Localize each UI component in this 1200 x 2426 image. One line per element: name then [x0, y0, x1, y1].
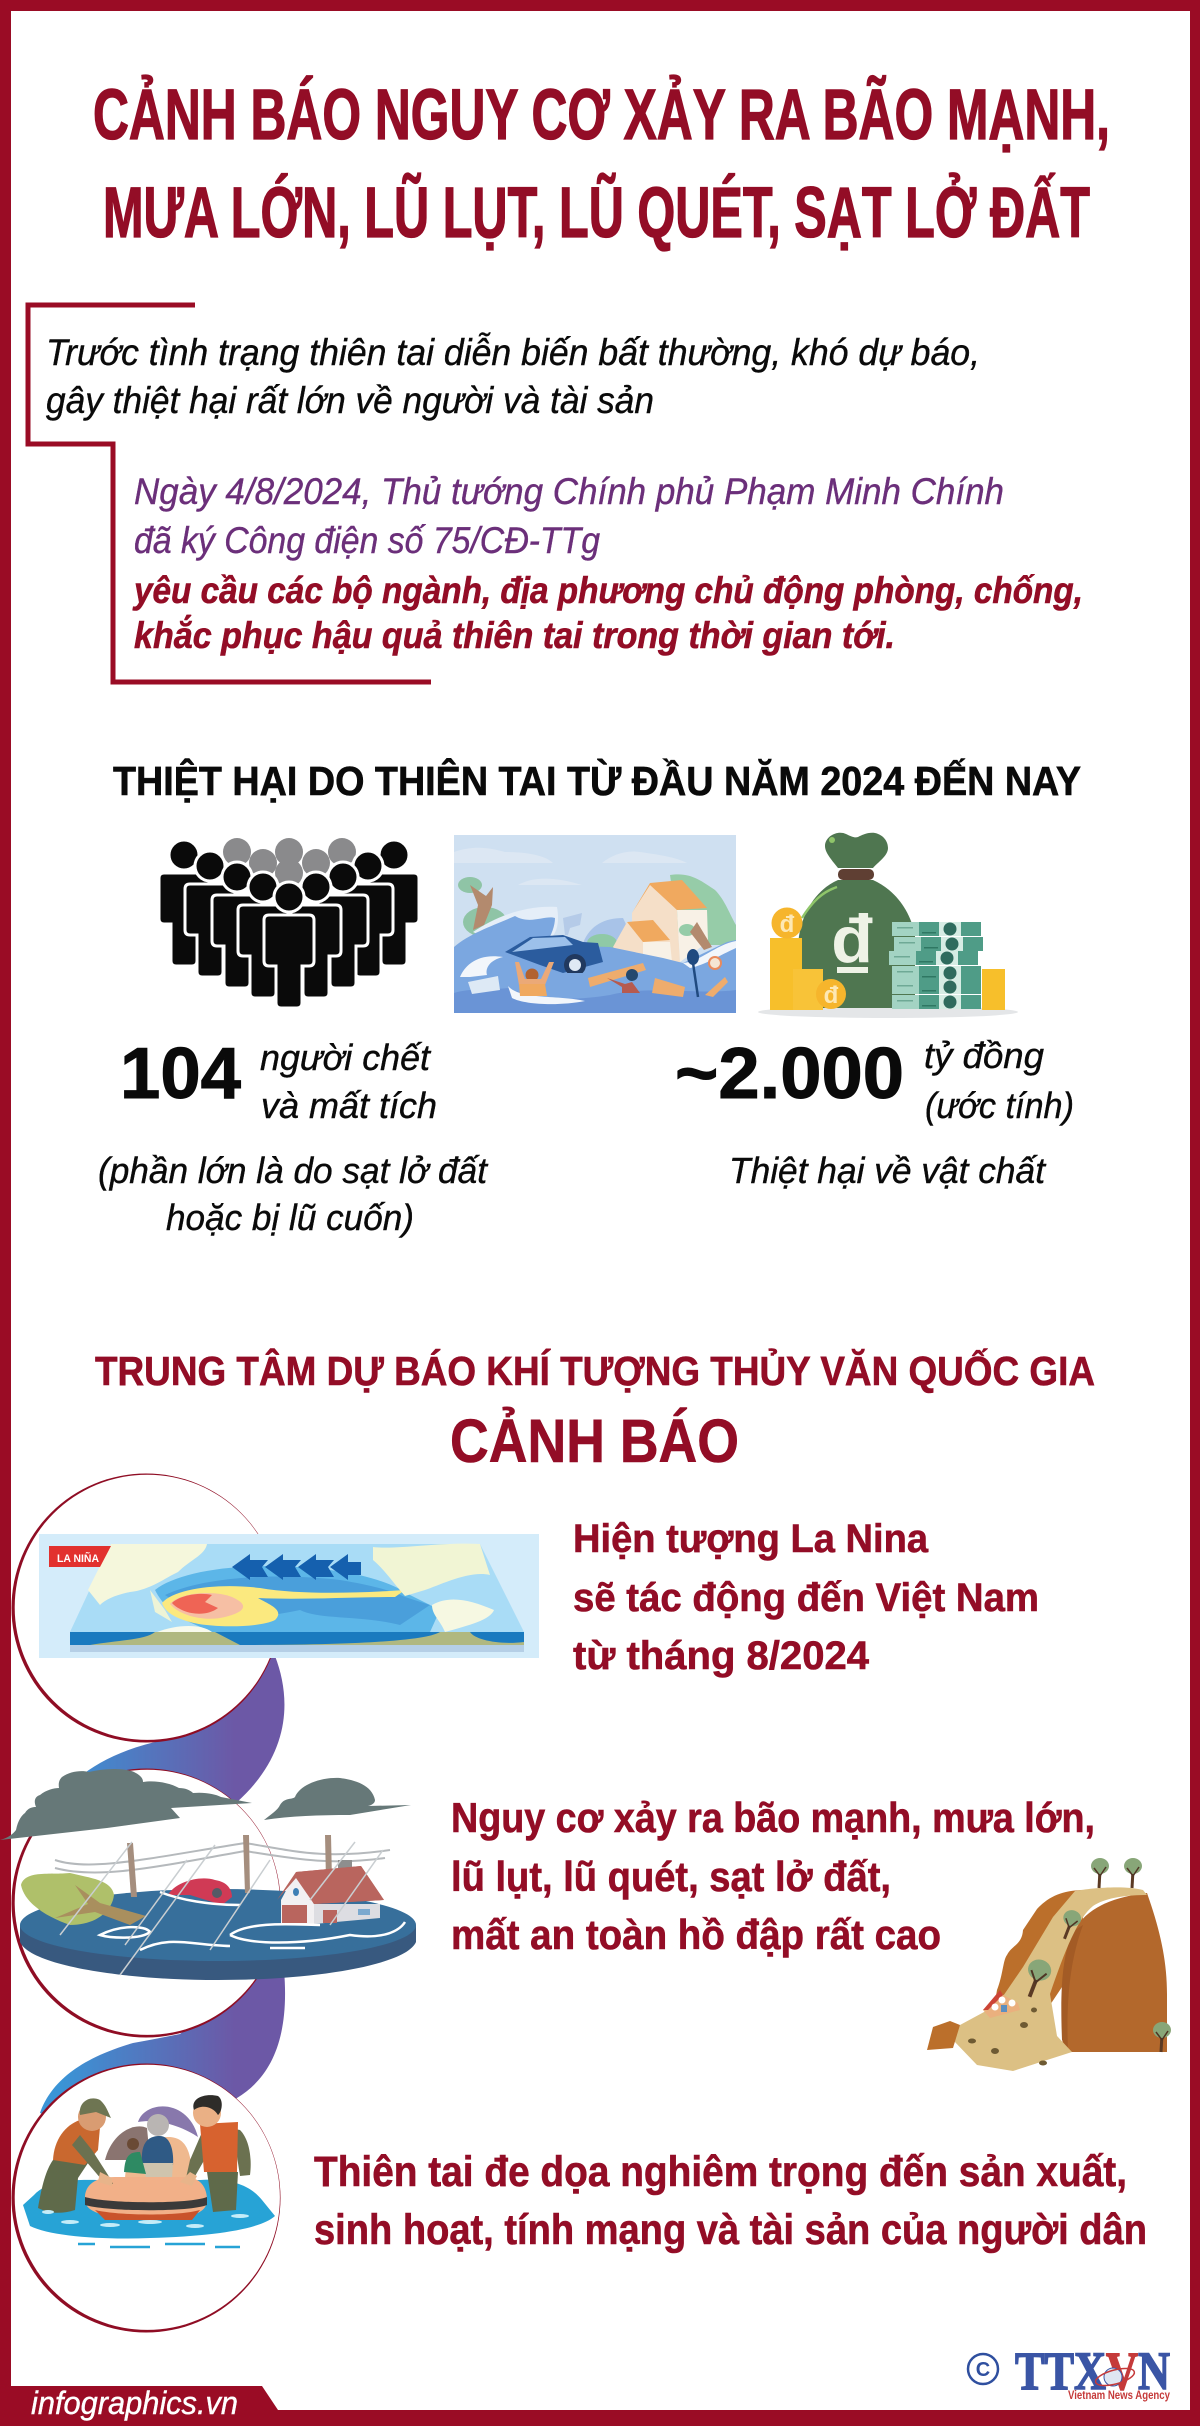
stat: people: người chết: [260, 1037, 432, 1078]
dispatch text: yêu cầu các bộ ngành, địa phương chủ động phòng, chống,: [132, 570, 1083, 611]
bracket frame around intro: [28, 305, 431, 682]
circle: first step: [12, 1474, 280, 1742]
intro text: gây thiệt hại rất lớn về người và tài sản: [46, 380, 654, 421]
heading: forecast centre: [95, 1348, 1095, 1475]
intro text: Trước tình trạng thiên tai diễn biến bất thường, khó dự báo,: [46, 332, 980, 373]
text: La Nina: [573, 1517, 1039, 1678]
title: [93, 76, 1110, 253]
stat: material damage: Thiệt hại về vật chất: [729, 1150, 1047, 1191]
text: storm risks: [451, 1794, 1095, 1958]
text: storm risks: mất an toàn hồ đập rất cao: [451, 1911, 941, 1958]
ribbon: first connector: [68, 1656, 284, 1850]
clouds: [0, 1769, 411, 1840]
landslide illustration: [927, 1858, 1171, 2071]
stat: material damage: tỷ đồng: [924, 1035, 1044, 1076]
La Nina map: [39, 1534, 539, 1658]
heading: forecast centre: CẢNH BÁO: [450, 1407, 739, 1475]
dispatch text: [132, 471, 1083, 656]
text: consequences: [314, 2148, 1147, 2254]
heading: damage: THIỆT HẠI DO THIÊN TAI TỪ ĐẦU NĂM 2024 ĐẾN NAY: [113, 758, 1081, 804]
text: storm risks: Nguy cơ xảy ra bão mạnh, mưa lớn,: [451, 1794, 1095, 1841]
stat: people: và mất tích: [261, 1085, 437, 1126]
logo: TTXVN: Vietnam News Agency: [1068, 2388, 1170, 2402]
circle: second step: [12, 1768, 280, 2038]
ribbon: second connector: [40, 1970, 285, 2150]
stat: people: 104: [120, 1034, 241, 1114]
stat: material damage: (ước tính): [925, 1085, 1074, 1126]
icon: money bag, coins and cash: [758, 833, 1018, 1018]
stat: material damage: ~2.000: [675, 1034, 904, 1114]
heading: forecast centre: TRUNG TÂM DỰ BÁO KHÍ TƯỢNG THỦY VĂN QUỐC GIA: [95, 1348, 1095, 1394]
circle: third step: [12, 2064, 280, 2332]
logo: TTXVN: C: [976, 2359, 990, 2381]
icon: money bag, coins and cash: đ: [831, 901, 873, 977]
dispatch text: Ngày 4/8/2024, Thủ tướng Chính phủ Phạm Minh Chính: [134, 471, 1004, 512]
icon: money bag, coins and cash: đ: [824, 982, 839, 1009]
intro text: [46, 332, 980, 421]
flooded island illustration: [20, 1835, 416, 1980]
flood illustration: [454, 835, 736, 1013]
text: consequences: Thiên tai đe dọa nghiêm trọng đến sản xuất,: [314, 2148, 1127, 2196]
icon: money bag, coins and cash: đ: [780, 911, 795, 938]
stat: material damage: [675, 1034, 1074, 1191]
text: storm risks: lũ lụt, lũ quét, sạt lở đất,: [451, 1853, 891, 1900]
icon: crowd of people: [159, 838, 419, 1008]
dispatch text: khắc phục hậu quả thiên tai trong thời gian tới.: [134, 614, 895, 656]
text: La Nina: từ tháng 8/2024: [573, 1634, 870, 1678]
stat: people: (phần lớn là do sạt lở đất: [98, 1150, 489, 1191]
stat: people: hoặc bị lũ cuốn): [166, 1197, 414, 1238]
logo: TTXVN: TTXVN: [1015, 2341, 1170, 2401]
footer site name: infographics.vn: [31, 2385, 238, 2421]
stat: people: [98, 1034, 489, 1238]
text: La Nina: Hiện tượng La Nina: [573, 1517, 929, 1561]
text: La Nina: sẽ tác động đến Việt Nam: [573, 1576, 1039, 1620]
La Nina map: LA NIÑA: [57, 1552, 99, 1565]
dispatch text: đã ký Công điện số 75/CĐ-TTg: [134, 520, 600, 561]
rescue illustration: [23, 2095, 275, 2247]
